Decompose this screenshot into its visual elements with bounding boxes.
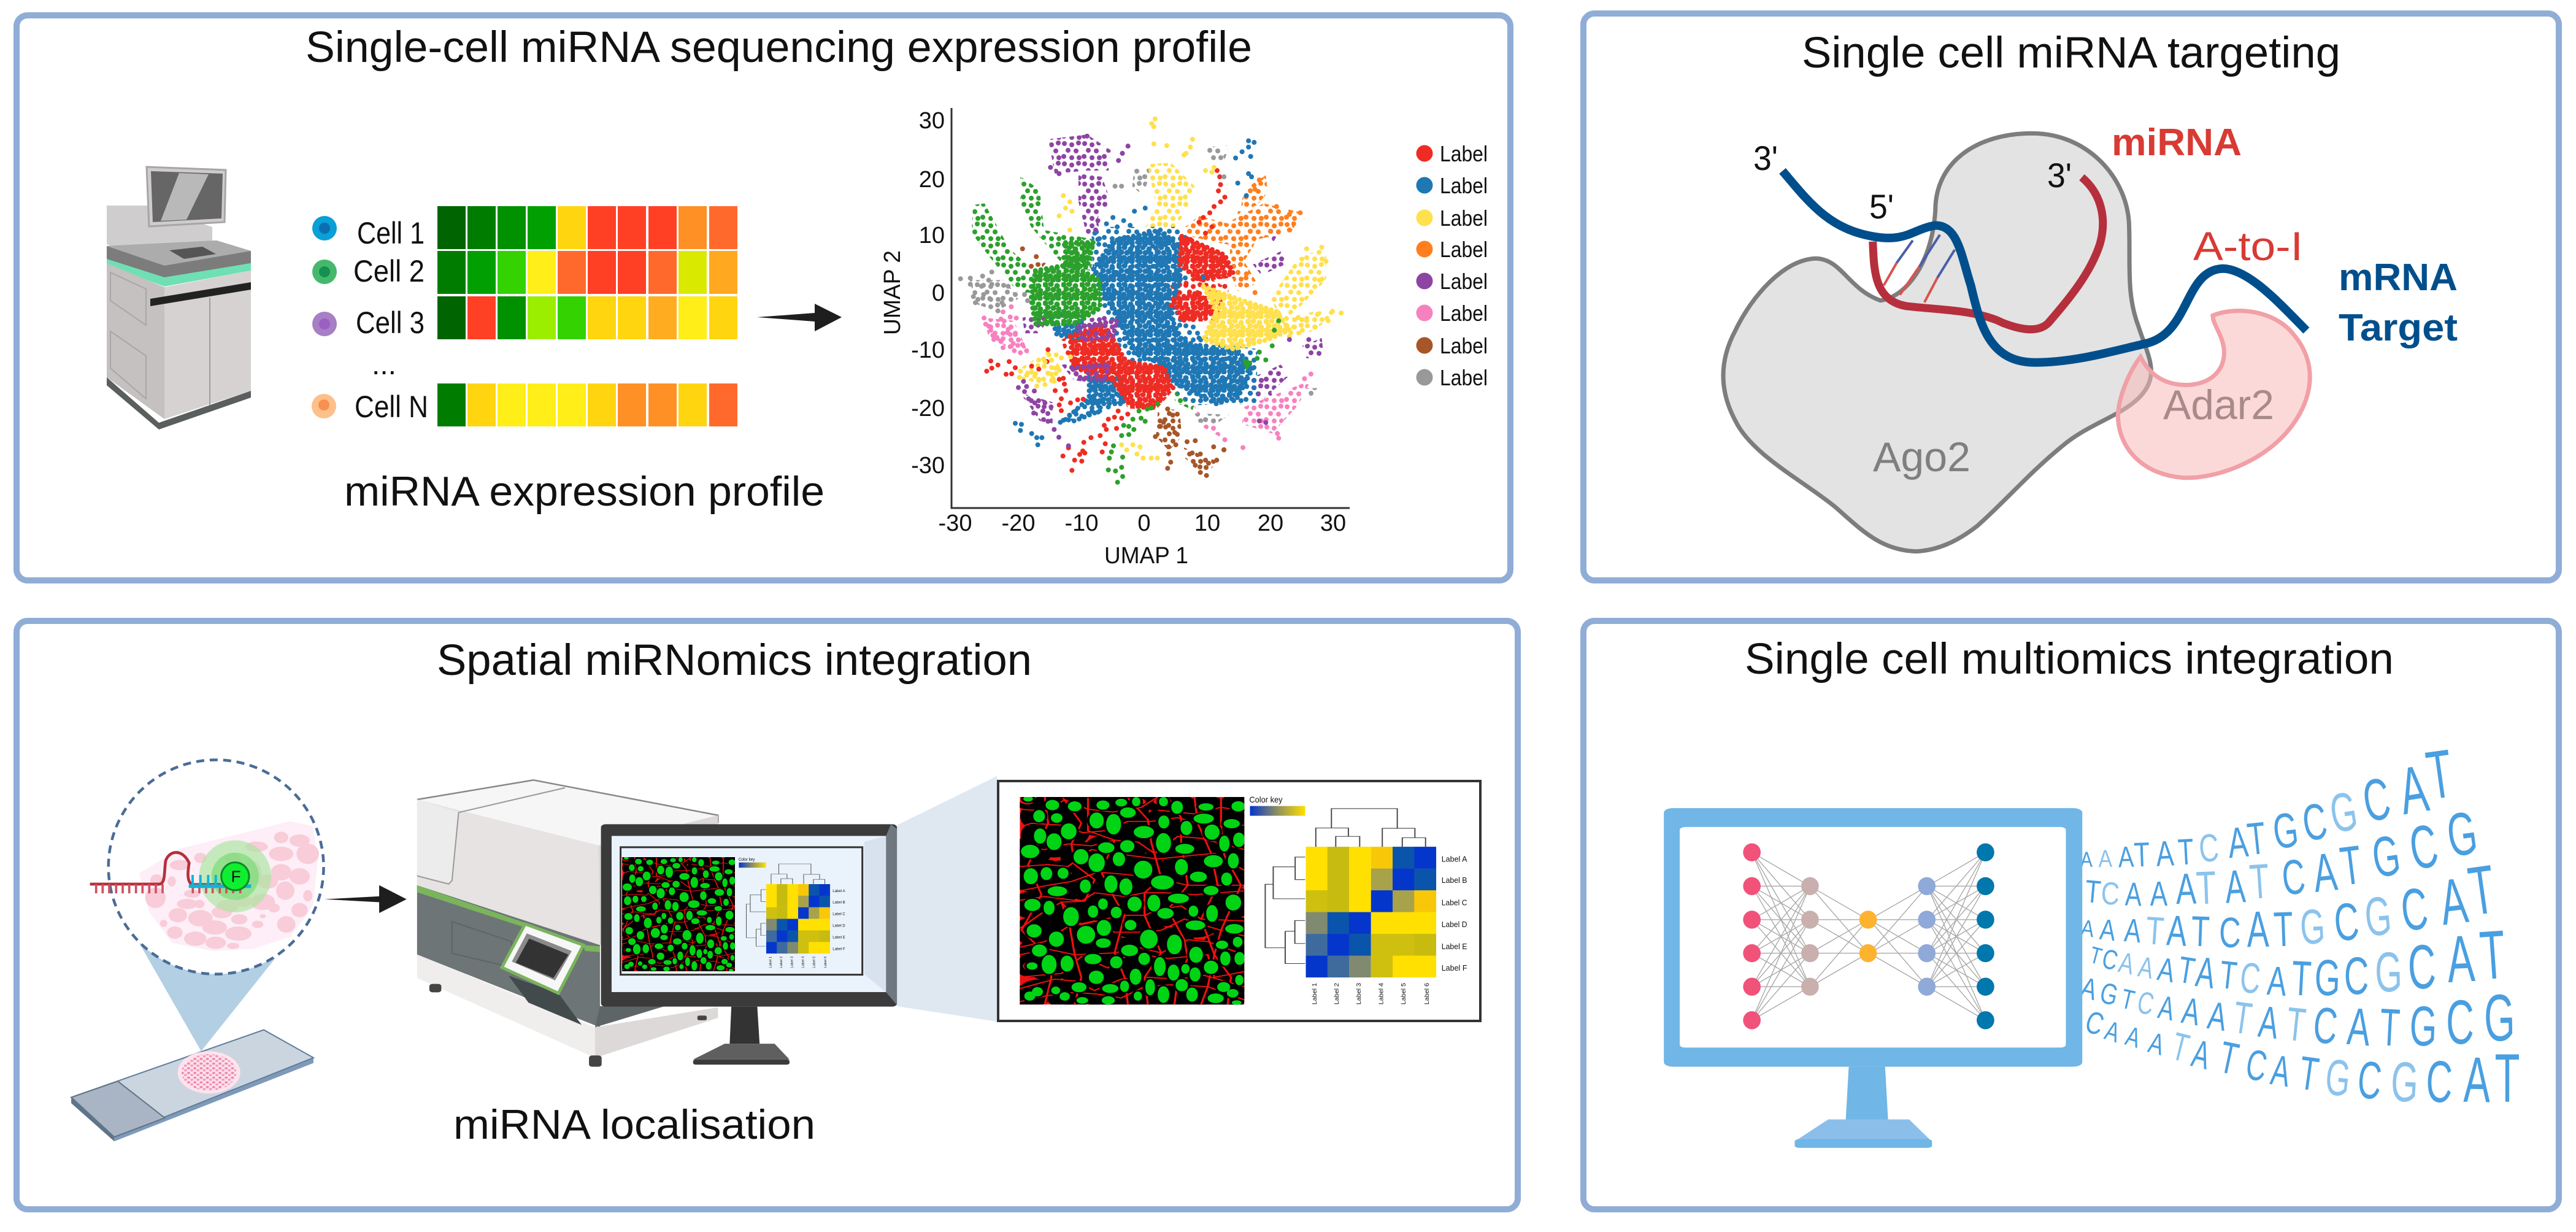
legend [1416, 141, 1488, 390]
illustration: imaging instrument [417, 780, 718, 1067]
label: Ago2: Ago2 [1873, 434, 1970, 480]
sequence row 2 [2083, 799, 2482, 914]
nodes: output layer [1977, 843, 1994, 1030]
sequence row 2: A [2124, 876, 2142, 914]
sequence row 6: G [2390, 1050, 2420, 1115]
scatter points: lower-left outliers [961, 272, 1224, 482]
base pairs [1884, 235, 1955, 302]
row: cell 2 [437, 251, 737, 294]
sequence row 5: A [2256, 996, 2282, 1049]
nodes: bottleneck layer [1859, 911, 1877, 962]
sequence row 3: A [2098, 914, 2117, 947]
label: mRNA Target: mRNA [2339, 256, 2458, 299]
sequence row 6: C [2425, 1049, 2454, 1115]
legend: Label [1440, 269, 1488, 294]
sequence row 2: T [2337, 834, 2365, 897]
cell list labels and icons: Cell 3 [356, 306, 425, 340]
sequence row 6: A [2145, 1026, 2168, 1061]
labels: strand ends [1753, 139, 2072, 226]
sequence row 5: A [2155, 988, 2178, 1028]
legend: Label [1440, 237, 1488, 262]
diagram: Ago2, Adar2 and RNA strands [1723, 133, 2310, 552]
panel: spatial miRNomics integration [17, 621, 1518, 1209]
legend: Label [1440, 141, 1488, 166]
sequence row 3: G [2299, 899, 2326, 955]
shape: Adar2 protein [2118, 311, 2310, 478]
icon: microscope slide with tissue [71, 1030, 313, 1141]
sequence row 4: C [2099, 944, 2121, 977]
shape: blue magnifying cone [139, 943, 275, 1051]
label: Adar2: Adar2 [2163, 382, 2274, 428]
icon: sequencing instrument [107, 167, 251, 429]
sequence row 5: A [2345, 997, 2372, 1057]
sequence row 1: T [2177, 831, 2194, 872]
y axis labels: -20 [911, 396, 945, 422]
axis title: UMAP 2: UMAP 2 [880, 250, 905, 335]
legend: Label [1440, 333, 1488, 358]
label: mRNA Target: Target [2339, 307, 2458, 349]
legend: Label [1440, 173, 1488, 198]
sequence row 2: C [2280, 849, 2307, 906]
strand: mRNA target [1782, 171, 2306, 363]
sequence row 6: A [2122, 1021, 2144, 1054]
y axis labels [911, 108, 945, 479]
sequence row 3: T [2464, 850, 2500, 930]
sequence row 5: G [2409, 995, 2438, 1058]
y axis labels: 10 [919, 223, 945, 248]
panel: single-cell miRNA sequencing expression profile [17, 15, 1510, 580]
sequence row 5: C [2134, 985, 2157, 1022]
sequence row 2: A [2310, 841, 2340, 904]
legend: Label [1440, 365, 1488, 390]
strand: miRNA [1873, 177, 2103, 329]
sequence row 3: C [2398, 876, 2431, 944]
row: cell 3 [437, 296, 737, 339]
axis title: UMAP 1: UMAP 1 [1104, 543, 1188, 569]
axes [952, 108, 1350, 508]
row: cell N [437, 383, 737, 426]
x axis labels: -20 [1002, 510, 1035, 536]
sequence row 4: C [2407, 931, 2437, 1002]
network edges [1752, 852, 1985, 1020]
sequence row 4: G [2374, 941, 2403, 1004]
y axis labels: 20 [919, 167, 945, 193]
sequence row 6: C [2242, 1040, 2270, 1091]
probe: miRNA hairpin and complementary strand [90, 852, 251, 893]
sequence row 6: T [2215, 1032, 2243, 1085]
illustration: slide, cone and dashed zoom circle [71, 760, 407, 1141]
sequence row 1: A [2080, 848, 2093, 872]
sequence row 1: C [2197, 825, 2220, 871]
heading: panel 2 title: Single cell miRNA targeting [1802, 29, 2340, 77]
panel: single cell multiomics integration [1583, 621, 2559, 1209]
cell list labels and icons: Cell N [355, 390, 428, 424]
illustration: monitor with analysis view [601, 824, 897, 1065]
cell list labels and icons: ... [372, 348, 396, 380]
sequence row 4: C [2238, 953, 2263, 1003]
sequence row 3: A [2436, 864, 2472, 939]
sequence row 3: A [2079, 915, 2096, 942]
sequence row 2: G [2443, 799, 2482, 870]
sequence row 4: A [2445, 922, 2477, 997]
sequence row 4: T [2290, 951, 2313, 1007]
sequence row 6: A [2268, 1046, 2294, 1096]
y axis labels: -10 [911, 337, 945, 363]
x axis labels: 0 [1137, 510, 1151, 536]
shape: magnified circle [109, 760, 324, 974]
sequence row 1: G [2326, 780, 2361, 844]
heading: panel 3 title: Spatial miRNomics integration [437, 636, 1032, 685]
sequence row 2: G [2369, 824, 2404, 890]
sequence row 6: T [2167, 1025, 2193, 1071]
heading: panel 4 title: Single cell multiomics integration [1745, 635, 2394, 683]
sequence row 4: A [2136, 950, 2157, 985]
x axis labels: -30 [939, 510, 972, 536]
sequence row 4: G [2313, 949, 2342, 1007]
sequence row 5: A [2179, 990, 2204, 1034]
sequence row 4: A [2116, 945, 2137, 981]
sequence row 5: T [2378, 998, 2401, 1058]
sequence row 1: T [2245, 814, 2268, 865]
sequence row 4: T [2175, 949, 2197, 993]
chart: UMAP scatter plot [880, 108, 1488, 569]
sequence row 3: G [2363, 885, 2394, 948]
illustration: tissue and fluorescent probe [90, 821, 319, 951]
sequence row 3 [2079, 850, 2500, 958]
sequence row 2: T [2248, 854, 2271, 910]
x axis labels [939, 510, 1346, 536]
sequence row 3: C [2332, 892, 2361, 952]
sequence row 4 [2087, 915, 2508, 1007]
sequence row 6: A [2463, 1044, 2491, 1116]
icon: computer monitor [1664, 808, 2082, 1148]
y axis labels: 30 [919, 108, 945, 134]
nodes: input layer [1743, 843, 1761, 1030]
y axis labels: -30 [911, 453, 945, 479]
sequence row 6 [2081, 1004, 2520, 1117]
sequence row 3: T [2191, 907, 2210, 956]
y axis labels: 0 [932, 280, 945, 306]
sequence row 4: A [2155, 951, 2178, 990]
heatmap: miRNA expression profile [437, 206, 737, 426]
legend: Label [1440, 206, 1488, 231]
shape: projection from monitor to enlarged view [897, 776, 997, 1022]
sequence row 6: A [2188, 1031, 2214, 1078]
arrow: heatmap to UMAP [757, 304, 842, 331]
image: cell segmentation [1020, 796, 1244, 1004]
sequence row 2: A [2224, 860, 2247, 913]
sequence row 5: T [2230, 992, 2255, 1044]
labels: strand ends: 5' [1869, 187, 1894, 226]
sequence row 5: G [2097, 976, 2121, 1012]
sequence row 3: T [2273, 902, 2294, 957]
sequence row 1: A [2098, 844, 2113, 872]
x axis labels: 10 [1194, 510, 1220, 536]
text: miRNA expression profile: miRNA expression profile [344, 468, 825, 515]
sequence row 1: T [2422, 736, 2458, 814]
sequence row 1: G [2270, 803, 2301, 860]
scatter points [970, 119, 1341, 475]
sequence row 4: T [2477, 915, 2508, 995]
cell list labels and icons: Cell 2 [353, 254, 425, 288]
sequence row 1: A [2118, 841, 2134, 874]
glow: fluorescent halo [199, 841, 271, 912]
sequence row 4: A [2266, 958, 2288, 1005]
sequence row 5: C [2446, 987, 2474, 1057]
sequence row 1: A [2394, 752, 2433, 829]
sequence row 2: A [2150, 874, 2168, 913]
sequence row 5: C [2311, 996, 2340, 1055]
icon: fluorophore F [221, 863, 249, 890]
sequence row 5: G [2483, 980, 2516, 1055]
sequence letters flowing from monitor [2077, 736, 2520, 1117]
sequence row 6: T [2494, 1039, 2520, 1117]
chart: clustered heatmap [1249, 795, 1467, 1004]
sequence row 3: A [2123, 912, 2143, 950]
sequence row 3: C [2219, 908, 2241, 957]
sequence row 1: C [2299, 792, 2331, 852]
legend: Label [1440, 301, 1488, 326]
tissue section [139, 821, 319, 951]
sequence row 6: A [2101, 1015, 2124, 1049]
sequence row 5: T [2118, 984, 2137, 1016]
sequence row 6: C [2081, 1004, 2108, 1042]
cell list labels and icons [312, 216, 428, 424]
nodes: encoder layer [1801, 877, 1819, 996]
sequence row 5 [2077, 971, 2516, 1058]
x axis labels: 30 [1320, 510, 1346, 536]
sequence row 4: T [2087, 942, 2105, 970]
sequence row 1: A [2155, 833, 2175, 874]
sequence row 5: A [2205, 993, 2230, 1039]
sequence row 2: T [2195, 861, 2217, 914]
label: mRNA Target [2339, 256, 2458, 349]
sequence row 1: T [2133, 836, 2150, 874]
sequence row 2: T [2083, 873, 2102, 910]
sequence row 3: A [2247, 901, 2270, 958]
text: F label: F [231, 867, 241, 885]
shape: Ago2 protein [1723, 133, 2151, 552]
panel: single cell miRNA targeting [1583, 13, 2559, 580]
heading: panel 1 title: Single-cell miRNA sequencing expression profile [306, 23, 1252, 72]
arrow: tissue to instrument [325, 885, 407, 913]
sequence row 3: T [2144, 908, 2166, 953]
x axis labels: 20 [1258, 510, 1283, 536]
text: miRNA localisation: miRNA localisation [453, 1101, 815, 1148]
sequence row 3: A [2166, 906, 2188, 955]
chart: autoencoder neural network [1743, 843, 1994, 1030]
cell list labels and icons: Cell 1 [357, 216, 425, 250]
x axis labels: -10 [1065, 510, 1098, 536]
sequence row 2: C [2100, 875, 2120, 912]
nodes: decoder layer [1918, 877, 1936, 996]
labels: strand ends: 3' [1753, 139, 1778, 177]
sequence row 6: T [2296, 1046, 2322, 1101]
sequence row 2: C [2405, 812, 2442, 883]
sequence row 6: G [2323, 1048, 2353, 1107]
sequence row 4: T [2218, 952, 2239, 998]
sequence row 2: A [2175, 864, 2197, 913]
labels: strand ends: 3' [2047, 156, 2072, 194]
sequence row 1 [2080, 736, 2458, 874]
sequence row 1: C [2358, 765, 2394, 834]
sequence row 5: A [2077, 971, 2101, 1007]
sequence row 4: A [2193, 948, 2218, 998]
row: cell 1 [437, 206, 737, 249]
sequence row 5: T [2284, 997, 2309, 1052]
inset: enlarged segmentation and heatmap [998, 781, 1480, 1021]
label: miRNA: miRNA [2112, 121, 2242, 164]
sequence row 4: C [2344, 947, 2369, 1006]
sequence row 6: C [2355, 1050, 2384, 1111]
label: A-to-I: A-to-I [2193, 223, 2303, 269]
sequence row 1: A [2226, 817, 2250, 867]
